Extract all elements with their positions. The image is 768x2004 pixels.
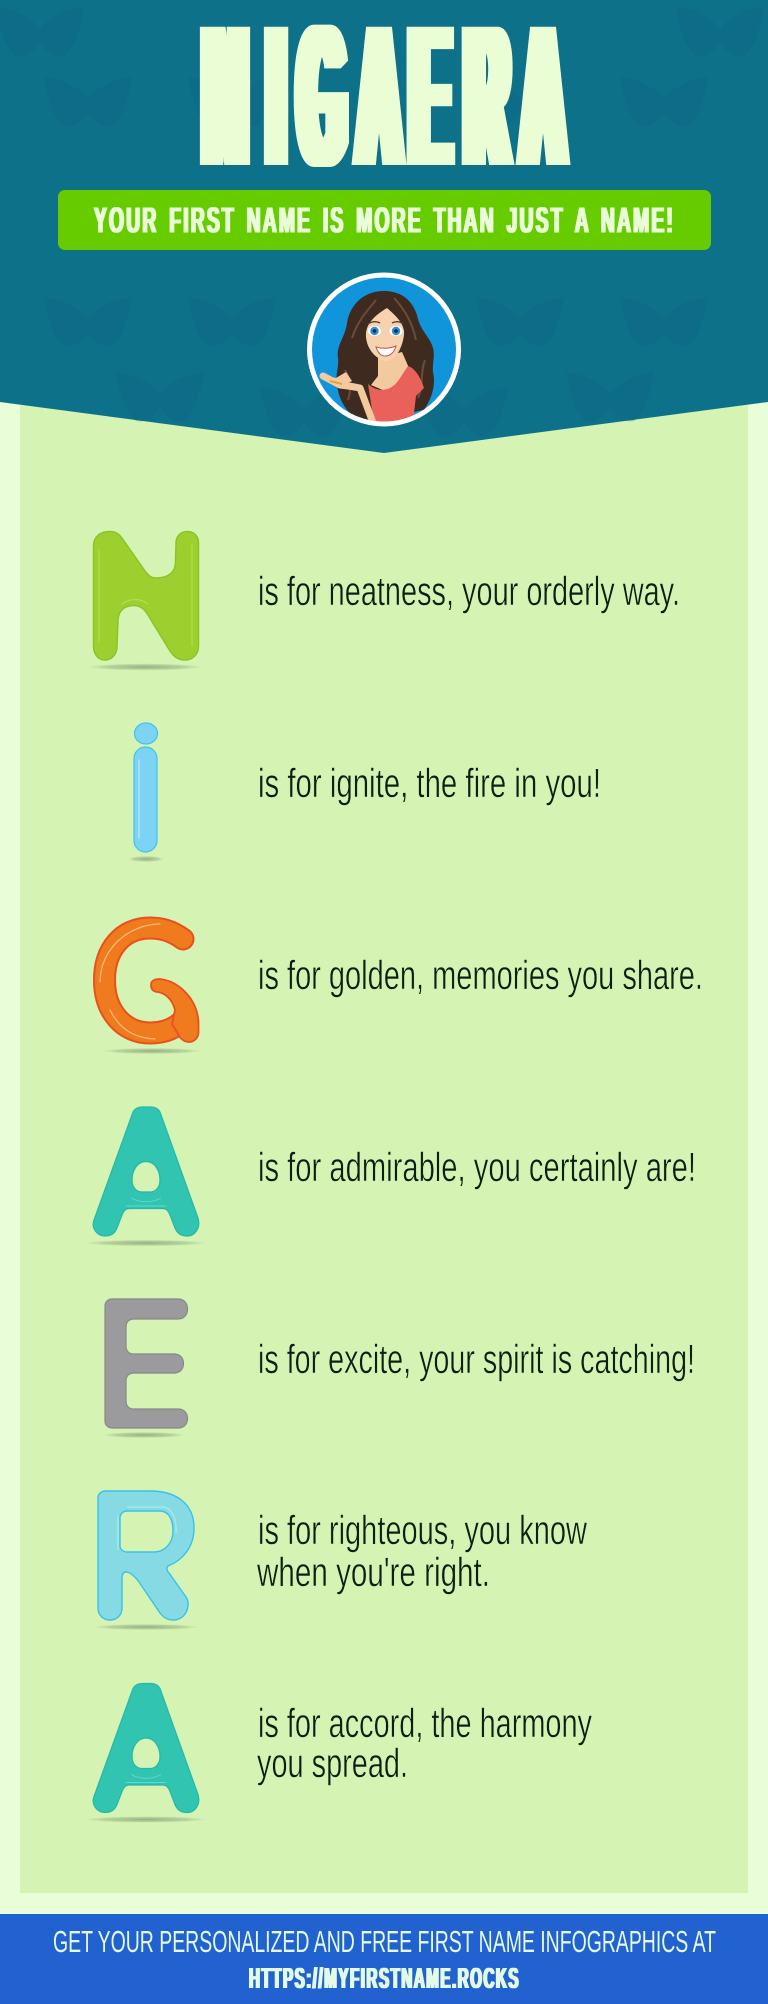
footer url: HTTPS://MYFIRSTNAME.ROCKS: [249, 1963, 520, 1995]
row: A2: [84, 1684, 593, 1823]
icon: letter G: [100, 924, 202, 1054]
row: A: [84, 1107, 696, 1246]
text: A2 lines: you spread.: [257, 1740, 408, 1786]
text: R lines: is for righteous, you know: [258, 1507, 588, 1553]
icon: letter E: [102, 1299, 188, 1438]
text: R lines: [256, 1507, 588, 1595]
text: A2 lines: [257, 1700, 593, 1786]
row: R: [92, 1491, 588, 1630]
icon: letter A: [84, 1107, 208, 1246]
row: I: [128, 723, 601, 862]
header band: [0, 0, 768, 453]
text: A2 lines: is for accord, the harmony: [258, 1700, 593, 1746]
row: E: [102, 1299, 695, 1438]
row: N: [87, 532, 680, 670]
row: G: [100, 924, 703, 1054]
icon: letter N: [87, 532, 203, 670]
tagline banner: [58, 190, 711, 250]
icon: letter R: [92, 1491, 200, 1630]
footer: [0, 1914, 768, 2004]
text: R lines: when you're right.: [256, 1549, 490, 1595]
icon: letter i: [128, 723, 164, 862]
avatar: woman portrait: [307, 272, 461, 430]
text: I line: is for ignite, the fire in you!: [258, 760, 601, 806]
icon: letter A: [84, 1684, 208, 1823]
content panel: [20, 395, 748, 1893]
